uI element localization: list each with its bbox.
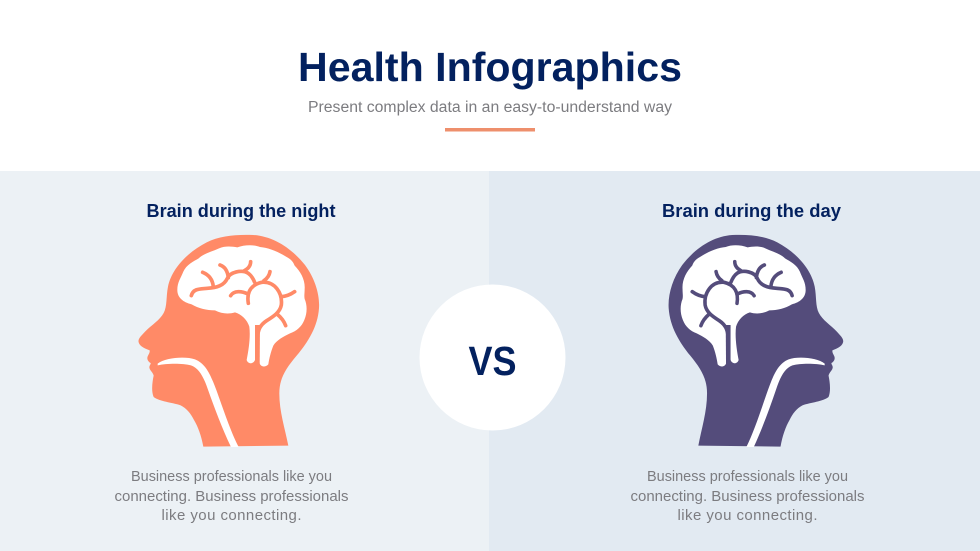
text block: night description: Business professionals like you — [131, 468, 332, 485]
accent line — [445, 128, 535, 132]
heading: night: Brain during the night — [146, 201, 336, 221]
subtitle: Present complex data in an easy-to-understand way — [308, 99, 672, 116]
VS badge — [420, 284, 566, 430]
text block: night description: connecting. Business professionals — [114, 488, 348, 505]
text block: day description: Business professionals like you — [647, 468, 848, 485]
text block: day description: like you connecting. — [678, 507, 818, 524]
icon: orange head with brain — [138, 235, 319, 447]
text block: night description: like you connecting. — [162, 507, 302, 524]
heading: day: Brain during the day — [662, 201, 841, 221]
text block: night description — [114, 468, 348, 524]
text block: day description — [630, 468, 864, 524]
title: Health Infographics — [298, 44, 682, 90]
panel: brain during the night — [0, 171, 489, 551]
panel: brain during the day — [489, 171, 980, 551]
icon: purple head with brain — [669, 235, 843, 447]
VS badge: VS — [468, 338, 516, 384]
text block: day description: connecting. Business professionals — [630, 488, 864, 505]
